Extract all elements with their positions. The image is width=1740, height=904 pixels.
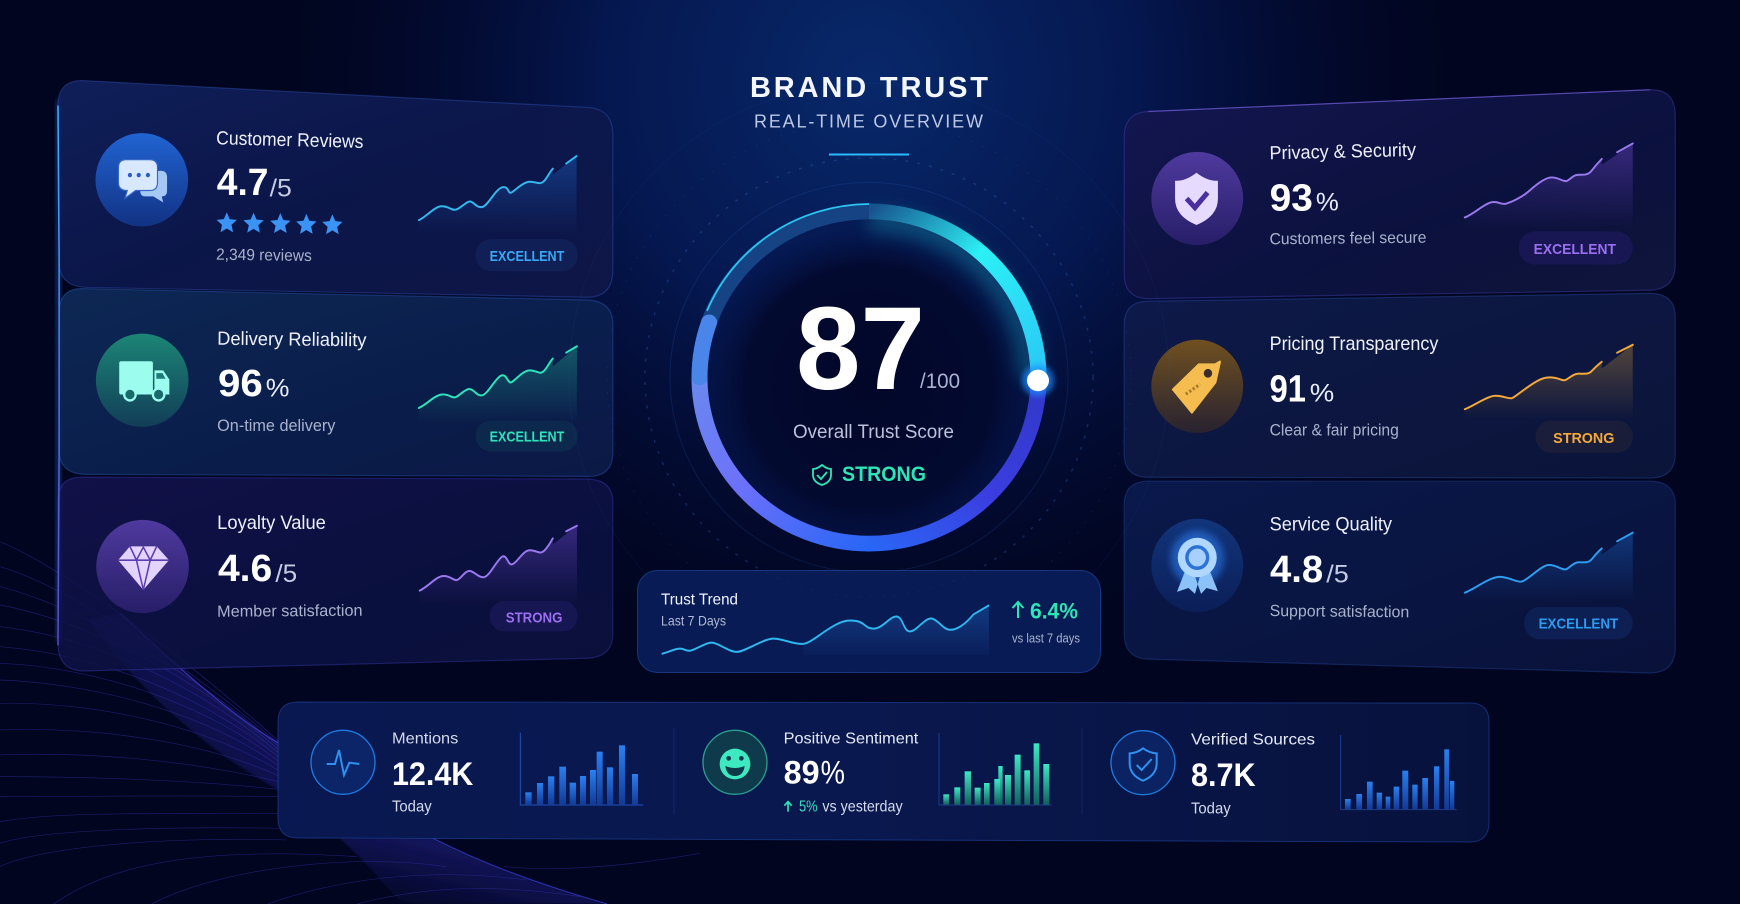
- panel: delivery reliability: [59, 289, 613, 476]
- panel: service quality: [1124, 481, 1675, 673]
- score: [217, 161, 292, 203]
- bar chart: [939, 733, 1052, 805]
- bar chart: [520, 733, 643, 805]
- icon: diamond: [96, 520, 189, 613]
- icon: chat bubbles: [95, 133, 188, 226]
- value: [784, 754, 845, 790]
- label: Positive Sentiment: [784, 730, 919, 747]
- label: Mentions: [392, 730, 458, 747]
- heading: Customer Reviews: [216, 127, 364, 152]
- score: [1270, 547, 1349, 590]
- badge: STRONG: [1553, 431, 1614, 447]
- background wave lines: [0, 542, 700, 904]
- score number: 87: [796, 283, 925, 415]
- gauge inner disc: [705, 217, 1033, 538]
- subtitle: REAL-TIME OVERVIEW: [754, 112, 983, 132]
- value: 12.4K: [392, 756, 473, 792]
- sparkline: [1465, 144, 1633, 228]
- score: 93: [1270, 176, 1313, 218]
- score label: Overall Trust Score: [793, 422, 954, 443]
- panel: pricing transparency: [1124, 293, 1675, 478]
- trend heading: Trust Trend: [661, 592, 738, 608]
- score: 91: [1270, 367, 1306, 409]
- gauge track highlight: [707, 204, 869, 311]
- heading: Delivery Reliability: [217, 327, 367, 350]
- badge: [1519, 231, 1633, 265]
- heading: Service Quality: [1270, 513, 1393, 535]
- badge: EXCELLENT: [490, 429, 564, 446]
- left edge glow: [56, 100, 61, 640]
- icon: pulse: [311, 730, 375, 794]
- score: [218, 362, 290, 404]
- score: /5: [1326, 560, 1349, 589]
- caption: On-time delivery: [217, 418, 335, 435]
- right column cards: [1124, 90, 1675, 673]
- badge: EXCELLENT: [1534, 242, 1616, 258]
- gauge glow: [869, 221, 1029, 378]
- badge: [476, 421, 578, 451]
- caption: Clear & fair pricing: [1270, 422, 1399, 439]
- gauge decorative rings: [569, 83, 1169, 671]
- right card top highlight: [1148, 90, 1650, 112]
- value: 8.7K: [1191, 757, 1256, 793]
- score: %: [1316, 188, 1339, 216]
- caption: Support satisfaction: [1270, 603, 1409, 621]
- icon: shield: [1151, 152, 1243, 245]
- gauge arc: violet: [700, 378, 869, 544]
- left edge highlight: [58, 105, 59, 645]
- metric: positive sentiment: [703, 730, 1052, 816]
- panel: loyalty value: [58, 477, 613, 671]
- caption: Today: [392, 799, 432, 816]
- trend period: Last 7 Days: [661, 612, 726, 628]
- heading: Privacy & Security: [1269, 139, 1417, 163]
- score: [218, 547, 297, 589]
- score: %: [1310, 379, 1334, 407]
- score: /5: [270, 174, 292, 203]
- heading: Loyalty Value: [217, 512, 326, 533]
- badge: [1524, 607, 1633, 639]
- badge: [476, 239, 578, 271]
- title: BRAND TRUST: [750, 72, 988, 104]
- sparkline: [420, 526, 577, 604]
- icon: truck: [96, 334, 188, 427]
- sparkline: [419, 156, 577, 234]
- gauge track: [709, 211, 869, 322]
- left column cards: [58, 81, 613, 671]
- badge: [1536, 421, 1633, 453]
- score: [1270, 176, 1339, 218]
- value: %: [821, 754, 845, 790]
- gauge: [569, 83, 1169, 671]
- star rating: [217, 212, 343, 234]
- icon: verified shield: [1111, 731, 1175, 795]
- change: [784, 799, 903, 816]
- score: /5: [275, 560, 297, 588]
- metric: mentions: [311, 730, 643, 816]
- caption: Customers feel secure: [1269, 229, 1427, 248]
- strong status: STRONG: [842, 463, 926, 486]
- trend change: 6.4%: [1030, 599, 1078, 624]
- badge: EXCELLENT: [1539, 617, 1618, 633]
- gauge arc: blue end: [700, 322, 709, 378]
- icon: price tag: [1151, 340, 1243, 433]
- score: 4.8: [1270, 547, 1323, 590]
- score: 4.7: [217, 161, 268, 203]
- score: %: [266, 374, 290, 403]
- panel: privacy and security: [1124, 90, 1675, 299]
- badge: EXCELLENT: [490, 249, 564, 265]
- change: 5%: [799, 799, 818, 816]
- score: 4.6: [218, 547, 272, 589]
- metric: verified sources: [1111, 731, 1457, 817]
- caption: Member satisfaction: [217, 602, 363, 621]
- score: 96: [218, 362, 263, 404]
- background wave band: [89, 613, 607, 904]
- score denominator: /100: [920, 370, 960, 393]
- panel: trust trend: [638, 570, 1100, 672]
- review count: 2,349 reviews: [216, 246, 312, 265]
- change: vs yesterday: [822, 799, 903, 816]
- caption: Today: [1191, 800, 1231, 817]
- gauge knob: [1022, 365, 1054, 396]
- gauge arc: cyan: [869, 211, 1038, 378]
- bar chart: [1341, 735, 1457, 810]
- icon: award ribbon: [1151, 519, 1243, 612]
- value: 89: [784, 754, 820, 790]
- panel: customer reviews: [58, 81, 613, 297]
- title accent line: [829, 154, 909, 156]
- sparkline: [419, 346, 577, 424]
- heading: Pricing Transparency: [1270, 333, 1439, 354]
- panel: bottom metrics: [278, 702, 1489, 842]
- sparkline: [1465, 533, 1633, 602]
- sparkline: [1465, 345, 1633, 420]
- trend comparison: vs last 7 days: [1012, 631, 1080, 646]
- label: Verified Sources: [1191, 731, 1315, 748]
- badge: [490, 601, 578, 631]
- gauge arc: indigo: [869, 378, 1038, 544]
- trend sparkline: [662, 605, 989, 655]
- badge: STRONG: [506, 610, 562, 626]
- score: [1270, 367, 1334, 409]
- icon: smiley: [703, 730, 767, 794]
